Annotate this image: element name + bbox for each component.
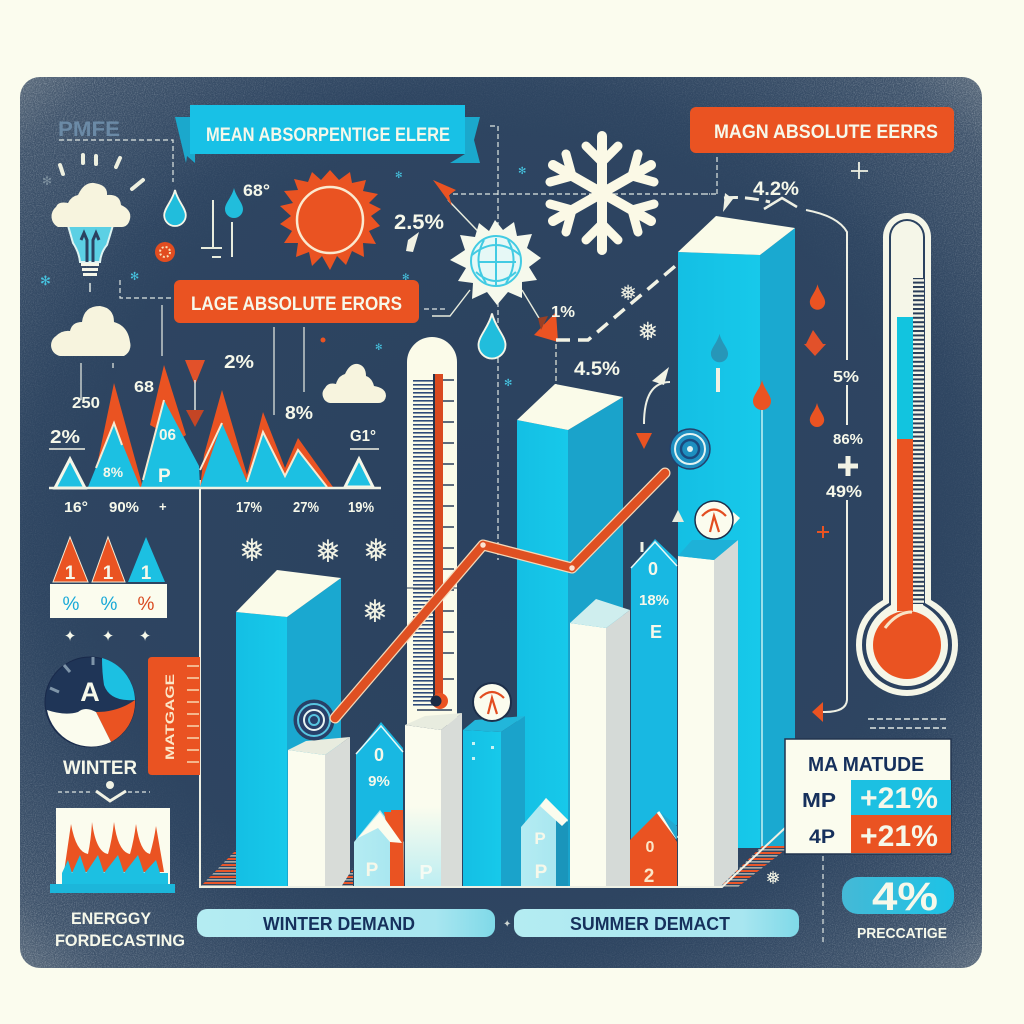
mountain chart xyxy=(49,365,381,488)
banner: mean absolute percentage error: MEAN ABSORPENTIGE ELERE xyxy=(206,125,450,146)
title: energy forecasting xyxy=(55,909,185,950)
house: light winter xyxy=(354,810,404,887)
gauge: winter: A xyxy=(80,677,100,707)
house: cyan winter: 9% xyxy=(368,773,390,790)
table: MA matude: 4P xyxy=(809,827,835,848)
snowflakes: winter: ❅ xyxy=(239,533,265,568)
bar: white center: P xyxy=(419,862,433,884)
house: cyan summer tall xyxy=(631,539,677,845)
icon: water drop on stand xyxy=(201,188,243,257)
table: MA matude: MP xyxy=(802,790,836,812)
house: cyan summer tall: 18% xyxy=(639,592,669,609)
chart: value labels: 68 xyxy=(134,379,154,396)
house: orange summer: 0 xyxy=(646,839,655,856)
banner: large absolute errors xyxy=(174,280,419,323)
trend line: demand xyxy=(335,473,665,718)
snowflakes: winter: ❅ xyxy=(363,533,389,568)
small ornaments: ✻ xyxy=(42,174,52,188)
small ornaments: ✻ xyxy=(375,343,383,353)
pill: 4 percent xyxy=(842,875,954,919)
banner: mean absolute errors: MAGN ABSOLUTE EERRS xyxy=(714,122,938,143)
icon: cloud medium xyxy=(51,306,130,356)
bar: short cyan xyxy=(463,716,525,887)
pill: 4 percent: 4% xyxy=(872,875,938,919)
house: light summer xyxy=(521,798,568,887)
arrow: orange down pointer xyxy=(534,312,558,342)
text: 4.2%: 4.2% xyxy=(753,179,799,200)
leader lines from banner xyxy=(81,305,304,415)
house: cyan summer tall: E xyxy=(650,622,662,642)
axis and floor hatch xyxy=(200,480,790,887)
text: 68°: 68° xyxy=(243,181,270,200)
legend: winter demand: WINTER DEMAND xyxy=(263,914,415,934)
icon: water drop xyxy=(164,190,186,226)
snowflakes: winter: ❅ xyxy=(619,282,637,305)
chart: value labels: 90% xyxy=(109,499,139,516)
legend: winter demand xyxy=(197,909,495,937)
chart: value labels: 17% xyxy=(236,499,262,516)
connector: bracket to right scale xyxy=(723,193,847,722)
icon: sun xyxy=(280,170,381,270)
badge: right gauge xyxy=(672,501,740,539)
triangles: percent tiles: 1 xyxy=(65,563,76,584)
thermometer: right xyxy=(856,213,958,696)
arrow: red down xyxy=(185,360,205,427)
side values xyxy=(826,369,863,501)
house: orange summer: 2 xyxy=(644,866,654,887)
icon: large snowflake xyxy=(550,136,654,250)
dotted marks xyxy=(868,719,946,728)
label: winter: WINTER xyxy=(63,758,137,779)
triangles: percent tiles: 1 xyxy=(141,563,152,584)
badge: center gauge xyxy=(473,683,511,721)
chart: value labels: G1° xyxy=(350,428,376,445)
arrow: curved around spiral xyxy=(636,367,670,449)
connector lines xyxy=(59,126,717,560)
banner: mean absolute errors xyxy=(690,107,954,153)
title: energy forecasting: FORDECASTING xyxy=(55,931,185,950)
side values: 49% xyxy=(826,482,862,501)
snowflakes: winter xyxy=(239,282,781,888)
tag: orange vertical: MATGAGE xyxy=(163,674,177,760)
chart: value labels xyxy=(49,352,379,516)
icon: small orange burst xyxy=(155,242,175,262)
small ornaments: ✻ xyxy=(40,274,51,289)
bar: white center xyxy=(405,713,462,887)
banner: mean absolute percentage error xyxy=(175,105,480,163)
ornament between legends: ✦ xyxy=(503,919,511,930)
chart: mini energy card xyxy=(50,808,175,893)
small ornaments: ✻ xyxy=(402,273,410,283)
chart: value labels: + xyxy=(159,499,167,514)
triangles: percent tiles: % xyxy=(63,594,80,615)
connector: vertical dashed xyxy=(555,344,557,395)
chart: value labels: 2% xyxy=(224,352,254,372)
snowflakes: winter: ❅ xyxy=(765,868,781,888)
icon: spiral marker right xyxy=(670,429,710,469)
house: light winter: P xyxy=(366,860,379,881)
house: cyan winter: 0 xyxy=(374,745,384,765)
thermometer: center xyxy=(407,337,457,725)
icon: water drop below flake xyxy=(478,314,506,358)
small ornaments: ✻ xyxy=(504,378,512,389)
plus marks xyxy=(851,162,868,179)
side values: 5% xyxy=(833,369,859,386)
chart: value labels: 19% xyxy=(348,499,374,516)
gauge: winter xyxy=(45,657,135,747)
legend: summer demand xyxy=(514,909,799,937)
triangles: percent tiles: 1 xyxy=(103,563,114,584)
bar: tall cyan right xyxy=(678,216,795,848)
table: MA matude: MA MATUDE xyxy=(808,754,924,776)
small ornaments: ✻ xyxy=(395,171,403,181)
chart: value labels: 250 xyxy=(72,395,100,412)
triangles: percent tiles: ✦ xyxy=(139,627,151,645)
table: MA matude xyxy=(785,739,951,854)
chart: value labels: 16° xyxy=(64,499,88,516)
side values: 86% xyxy=(833,431,863,448)
chart: value labels: 8% xyxy=(285,403,313,423)
house: light summer: P xyxy=(534,829,546,848)
table: MA matude: +21% xyxy=(860,782,938,815)
bar: white summer xyxy=(570,599,630,887)
icon: spiral marker left xyxy=(294,700,334,740)
mountain chart: 8% xyxy=(103,464,124,480)
connector: dashed trend to tall bar xyxy=(556,262,680,340)
icon: ornate snowflake xyxy=(432,220,545,328)
icons: drops on tall bar xyxy=(711,284,829,538)
bar: winter white xyxy=(288,737,350,887)
bar: winter cyan xyxy=(236,570,341,887)
title: energy forecasting: ENERGGY xyxy=(71,909,152,928)
chart: value labels: 2% xyxy=(50,427,80,447)
label: percentage: PRECCATIGE xyxy=(857,925,947,942)
snowflakes: winter: ❅ xyxy=(362,594,388,629)
icon: cloud and light bulb xyxy=(52,155,143,292)
triangles: percent tiles xyxy=(50,537,167,645)
arrow: orange pointer up xyxy=(406,180,494,252)
house: light summer: P xyxy=(535,862,548,883)
tag: orange vertical xyxy=(148,657,200,775)
text: 4.5%: 4.5% xyxy=(574,359,620,380)
small ornaments: ✻ xyxy=(518,166,526,177)
house: cyan winter xyxy=(356,722,403,860)
triangles: percent tiles: % xyxy=(138,594,155,615)
bar: tall cyan center xyxy=(517,384,623,887)
chart: value labels: 27% xyxy=(293,499,319,516)
mountain chart: 06 xyxy=(159,427,176,444)
house: cyan summer tall: 0 xyxy=(648,559,658,579)
triangles: percent tiles: ✦ xyxy=(64,627,76,645)
table: MA matude: +21% xyxy=(860,820,938,853)
house: orange summer xyxy=(630,812,677,887)
icon: cloud small xyxy=(323,364,386,403)
label: PMFE watermark: PMFE xyxy=(58,118,120,141)
text: 10%: 1% xyxy=(551,304,575,321)
banner: large absolute errors: LAGE ABSOLUTE ERORS xyxy=(191,294,402,315)
text: 2.5%: 2.5% xyxy=(394,211,444,234)
mountain chart: P xyxy=(158,466,171,487)
triangles: percent tiles: % xyxy=(101,594,118,615)
small ornaments: ✻ xyxy=(130,270,139,283)
snowflakes: winter: ❅ xyxy=(638,318,658,346)
divider: chevron xyxy=(58,781,150,801)
snowflakes: winter: ❅ xyxy=(315,534,341,569)
triangles: percent tiles: ✦ xyxy=(102,627,114,645)
legend: summer demand: SUMMER DEMACT xyxy=(570,914,730,934)
bar: white right xyxy=(678,540,738,887)
small ornaments xyxy=(40,166,526,389)
